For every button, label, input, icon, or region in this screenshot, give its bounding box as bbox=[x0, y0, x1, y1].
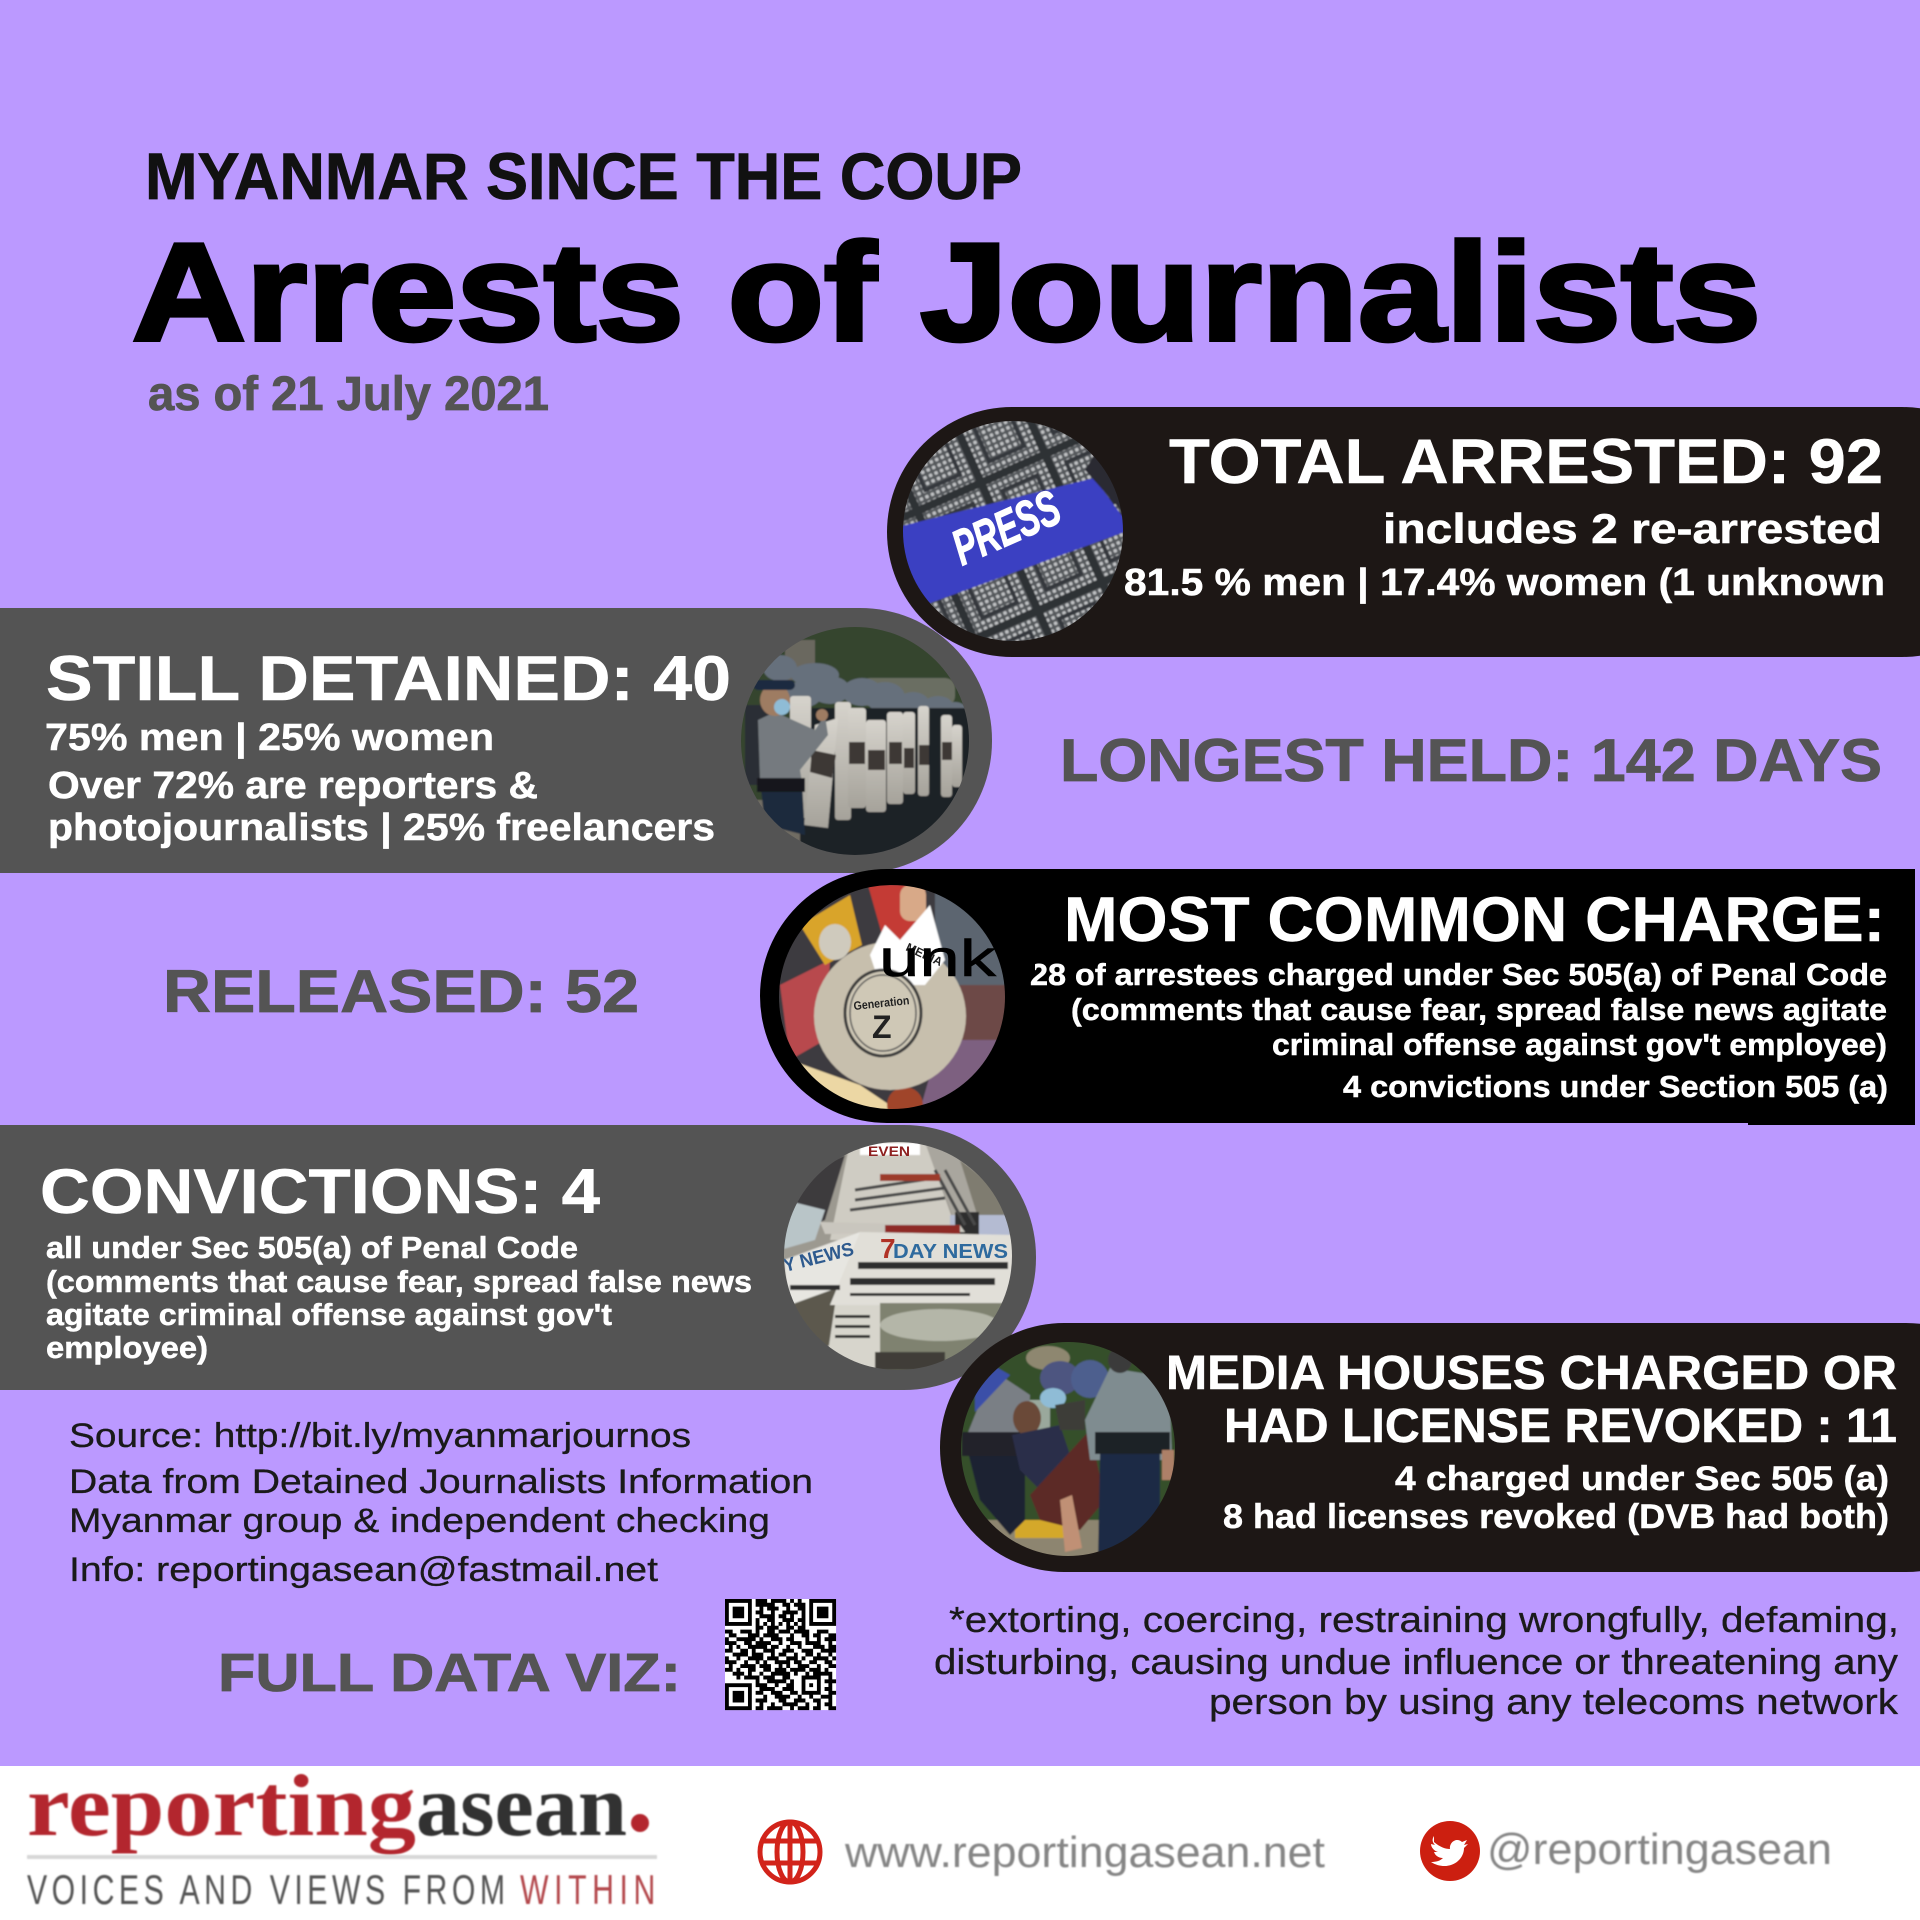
image: generation Z illustration: Generation bbox=[853, 993, 910, 1013]
image: newspapers: EVEN bbox=[868, 1143, 910, 1159]
website text: www.reportingasean.net bbox=[844, 1828, 1325, 1877]
left officer bbox=[968, 1378, 1031, 1433]
overlapping text fragment: unk bbox=[879, 930, 997, 988]
still detained text: 75% men | 25% women bbox=[45, 717, 494, 759]
media houses text: MEDIA HOUSES CHARGED OR bbox=[1166, 1347, 1897, 1400]
officer bbox=[758, 712, 828, 782]
twitter handle text: @reportingasean bbox=[1487, 1825, 1832, 1874]
most common charge text: MOST COMMON CHARGE: bbox=[1064, 885, 1885, 955]
most common charge text: 4 convictions under Section 505 (a) bbox=[1343, 1069, 1888, 1104]
image: generation Z illustration bbox=[779, 885, 1005, 1109]
convictions text: employee) bbox=[46, 1330, 208, 1365]
total arrested text bbox=[1124, 427, 1885, 604]
logo: reportingasean: asean bbox=[416, 1758, 627, 1855]
full data viz label: FULL DATA VIZ: bbox=[218, 1643, 681, 1703]
heading: date: as of 21 July 2021 bbox=[148, 368, 549, 421]
icon: globe bbox=[760, 1822, 820, 1882]
total arrested text: TOTAL ARRESTED: 92 bbox=[1169, 427, 1883, 497]
footnote text block: disturbing, causing undue influence or threatening any bbox=[934, 1641, 1898, 1682]
image: riot police line bbox=[740, 625, 972, 860]
total arrested text: includes 2 re-arrested bbox=[1383, 505, 1882, 552]
heading: title: Arrests of Journalists bbox=[132, 215, 1761, 370]
most common charge text: criminal offense against gov't employee) bbox=[1272, 1027, 1887, 1062]
still detained text bbox=[45, 644, 731, 849]
footnote text block: person by using any telecoms network bbox=[1209, 1681, 1899, 1722]
media houses text bbox=[1166, 1347, 1897, 1536]
man pulled bbox=[1013, 1401, 1041, 1435]
heading: kicker: MYANMAR SINCE THE COUP bbox=[145, 139, 1022, 213]
image: newspapers: 7 bbox=[880, 1233, 896, 1264]
panel: still detained bbox=[0, 608, 992, 873]
centre figures bbox=[1026, 1346, 1070, 1370]
convictions text: all under Sec 505(a) of Penal Code bbox=[46, 1230, 578, 1265]
panel: convictions bbox=[0, 1125, 1036, 1390]
shield bands bbox=[810, 742, 952, 778]
image: newspapers: Y NEWS bbox=[781, 1239, 856, 1277]
convictions text bbox=[40, 1157, 752, 1365]
convictions text: agitate criminal offense against gov't bbox=[46, 1297, 612, 1332]
stat: longest held: LONGEST HELD: 142 DAYS bbox=[1060, 727, 1882, 794]
total arrested text: 81.5 % men | 17.4% women (1 unknown bbox=[1124, 562, 1885, 604]
source text block: Myanmar group & independent checking bbox=[69, 1502, 770, 1540]
footnote text block bbox=[934, 1599, 1899, 1722]
media houses text: 4 charged under Sec 505 (a) bbox=[1395, 1460, 1889, 1498]
panel: total arrested bbox=[887, 407, 1920, 657]
still detained text: STILL DETAINED: 40 bbox=[46, 644, 731, 714]
most common charge text: (comments that cause fear, spread false news agitate bbox=[1071, 992, 1887, 1027]
most common charge text: 28 of arrestees charged under Sec 505(a) of Penal Code bbox=[1030, 957, 1887, 992]
media houses text: 8 had licenses revoked (DVB had both) bbox=[1223, 1498, 1889, 1536]
image: generation Z illustration: Z bbox=[872, 1009, 892, 1045]
image: newspapers: DAY NEWS bbox=[893, 1241, 1008, 1263]
source text block: Source: http://bit.ly/myanmarjournos bbox=[69, 1417, 691, 1455]
panel: media houses bbox=[940, 1323, 1920, 1572]
logo: reportingasean: VOICES AND VIEWS FROM bbox=[27, 1866, 505, 1913]
still detained text: Over 72% are reporters & bbox=[48, 765, 538, 807]
logo: reportingasean: reporting bbox=[27, 1758, 416, 1855]
dark body mass and legs bbox=[800, 708, 972, 860]
logo: reportingasean bbox=[27, 1758, 657, 1913]
shields bbox=[790, 696, 962, 828]
image: generation Z illustration: MEDIA bbox=[904, 940, 945, 969]
right officer bbox=[1085, 1368, 1172, 1460]
convictions text: CONVICTIONS: 4 bbox=[40, 1157, 600, 1227]
source text block: Info: reportingasean@fastmail.net bbox=[69, 1551, 659, 1589]
image: police dragging a man bbox=[958, 1338, 1178, 1560]
footer band bbox=[0, 1758, 1920, 1920]
image: press armband on carpet: PRESS bbox=[944, 479, 1069, 576]
helmets bbox=[764, 654, 964, 709]
footnote text block: *extorting, coercing, restraining wrongfully, defaming, bbox=[949, 1599, 1899, 1640]
image: press armband on carpet bbox=[898, 418, 1130, 644]
icon: twitter bbox=[1420, 1821, 1480, 1881]
stat: released: RELEASED: 52 bbox=[163, 958, 639, 1025]
source text block bbox=[69, 1417, 813, 1589]
convictions text: (comments that cause fear, spread false news bbox=[46, 1264, 752, 1299]
still detained text: photojournalists | 25% freelancers bbox=[48, 807, 715, 849]
logo: reportingasean: WITHIN bbox=[520, 1866, 655, 1913]
image: newspapers bbox=[780, 1140, 1016, 1376]
QR code bbox=[725, 1599, 836, 1710]
source text block: Data from Detained Journalists Information bbox=[69, 1463, 813, 1501]
panel: most common charge bbox=[760, 869, 1915, 1125]
media houses text: HAD LICENSE REVOKED : 11 bbox=[1224, 1400, 1897, 1453]
most common charge text bbox=[1026, 885, 1888, 1104]
